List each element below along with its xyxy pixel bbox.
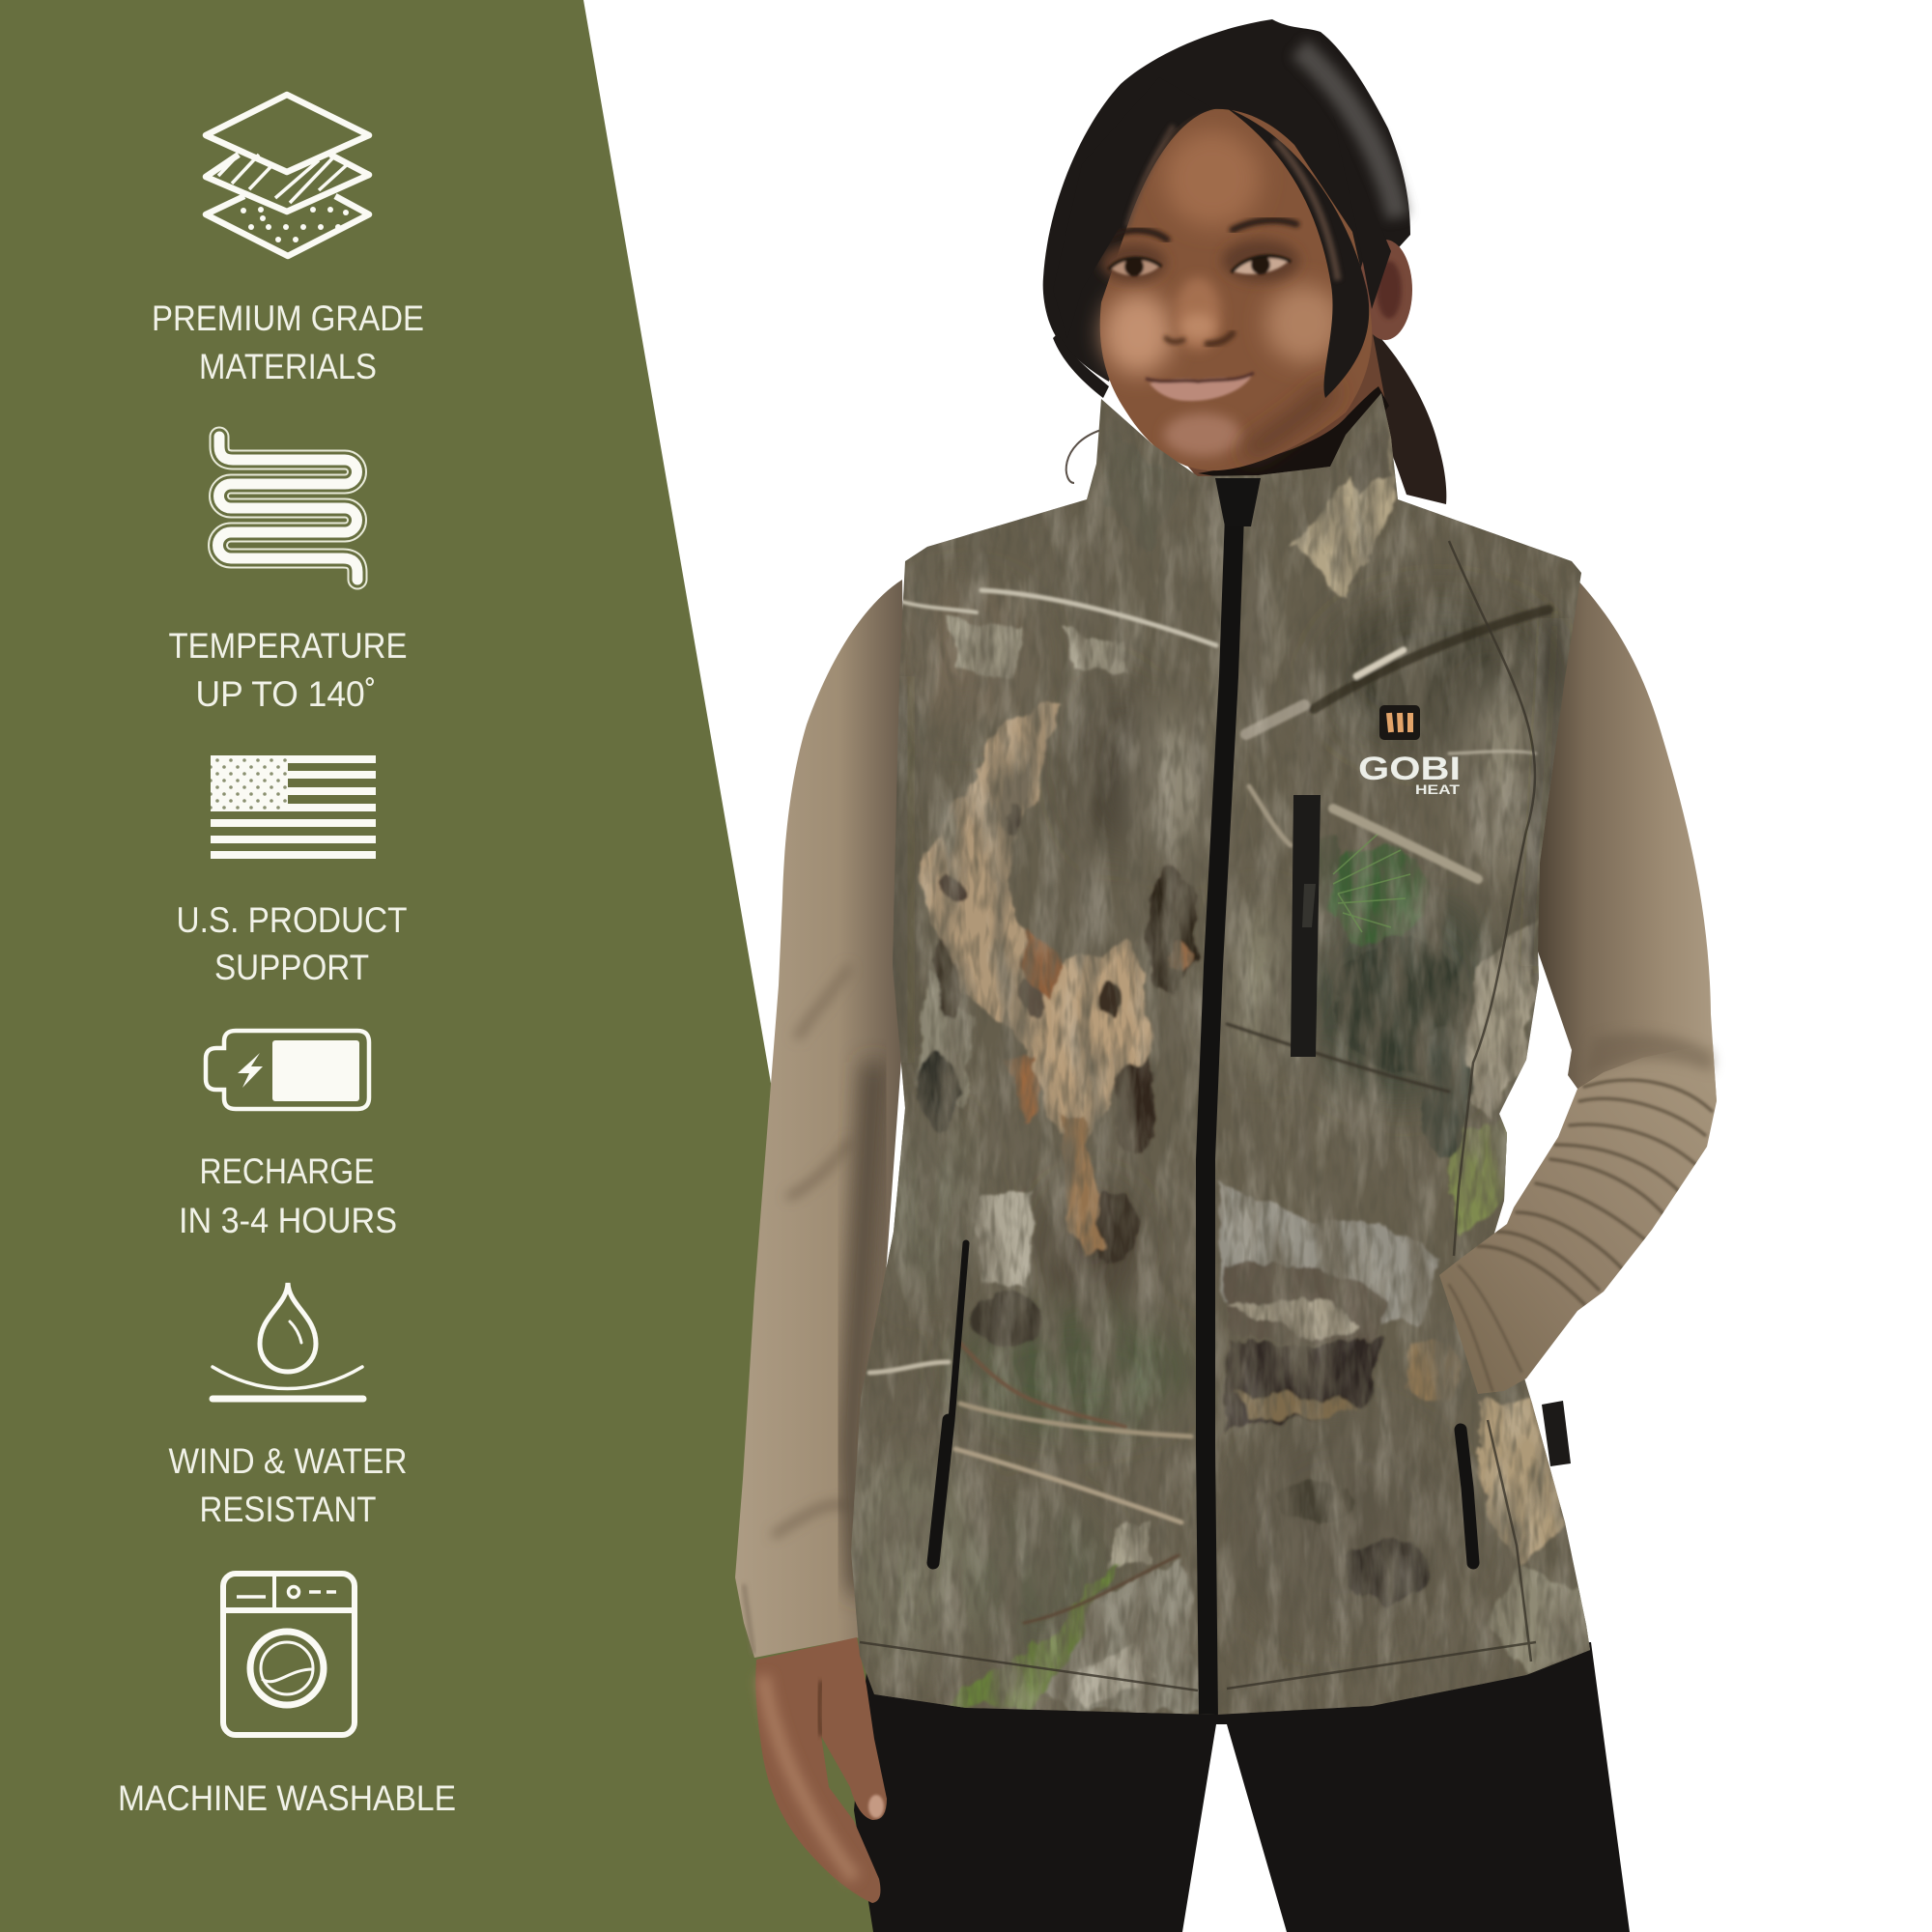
face <box>1100 109 1372 470</box>
right pocket zipper <box>1461 1430 1473 1563</box>
gray log <box>1220 1183 1439 1323</box>
camo bark texture <box>831 386 1623 1739</box>
label: temperature up to 140 degrees: TEMPERATURE <box>168 626 408 666</box>
ponytail <box>1367 328 1446 504</box>
label: premium grade materials: MATERIALS <box>199 347 377 386</box>
label: temperature up to 140 degrees <box>168 626 408 714</box>
black pants <box>854 1642 1630 1932</box>
label: machine washable: MACHINE WASHABLE <box>118 1778 456 1818</box>
camo painted shapes <box>918 415 1599 1710</box>
gobi heat logo: HEAT <box>1415 781 1461 797</box>
lower left log and moss <box>1044 1557 1199 1714</box>
hair front strands <box>1053 77 1391 483</box>
vest seams <box>860 541 1536 1690</box>
label: u.s. product support: SUPPORT <box>214 948 369 987</box>
collar patches <box>1294 415 1396 599</box>
dark shadows <box>1146 866 1196 989</box>
eyes <box>1109 255 1291 276</box>
dead leaf one <box>923 705 1066 1048</box>
icon: american flag <box>211 755 376 859</box>
dead leaf two <box>1029 942 1150 1150</box>
icon: water drop on surface <box>213 1283 363 1399</box>
light bark patches <box>980 1188 1033 1290</box>
label: wind and water resistant <box>168 1441 408 1529</box>
nose <box>1166 333 1233 344</box>
gobi heat logo: GOBI <box>1358 751 1461 787</box>
label: u.s. product support: U.S. PRODUCT <box>176 900 408 940</box>
photo: woman wearing camo heated vest <box>735 19 1717 1932</box>
icon: material layers <box>206 95 369 256</box>
icon: heating element coil <box>217 437 357 580</box>
label: premium grade materials <box>152 298 424 386</box>
label: wind and water resistant: WIND & WATER <box>168 1441 408 1481</box>
vest edge shading <box>898 618 1555 1063</box>
sleeve wrinkles <box>1449 1080 1712 1391</box>
vest hang tag <box>1542 1401 1571 1466</box>
pine needles <box>1324 845 1429 942</box>
pine needle strokes <box>1333 831 1410 932</box>
camo vest <box>831 386 1623 1739</box>
leaf stem tip <box>1058 1111 1101 1256</box>
left sleeve <box>735 580 908 1658</box>
power button <box>1379 705 1420 740</box>
chest pocket zipper <box>1291 795 1321 1057</box>
mouth <box>1146 373 1254 401</box>
hair shine <box>1299 48 1398 217</box>
hand <box>755 1637 887 1903</box>
brows <box>1111 230 1167 240</box>
label: temperature up to 140 degrees: UP TO 140˚ <box>195 674 377 714</box>
center zipper <box>1206 488 1236 1719</box>
label: wind and water resistant: RESISTANT <box>199 1490 377 1529</box>
camo base <box>831 386 1623 1739</box>
label: premium grade materials: PREMIUM GRADE <box>152 298 424 338</box>
icon: charging battery <box>206 1031 369 1109</box>
label: u.s. product support <box>176 900 408 987</box>
leaf spots and rust edges <box>1007 804 1022 837</box>
camo colour blocks <box>860 589 1555 1671</box>
zipper pull <box>1302 884 1316 927</box>
neck and black base layer <box>1121 328 1386 478</box>
label: recharge in 3-4 hours <box>179 1151 397 1240</box>
icon: washing machine <box>223 1574 355 1735</box>
hair back <box>1043 19 1410 382</box>
label: recharge in 3-4 hours: IN 3-4 HOURS <box>179 1201 397 1240</box>
collar zip top <box>1215 478 1261 526</box>
gobi heat logo <box>1358 751 1461 797</box>
ear <box>1358 240 1412 340</box>
left pocket zipper <box>933 1243 966 1563</box>
branches <box>869 590 1548 1623</box>
label: recharge in 3-4 hours: RECHARGE <box>199 1151 375 1191</box>
right upper sleeve <box>1536 577 1717 1121</box>
panel: olive background <box>0 0 918 1932</box>
right forearm <box>1439 1033 1717 1394</box>
